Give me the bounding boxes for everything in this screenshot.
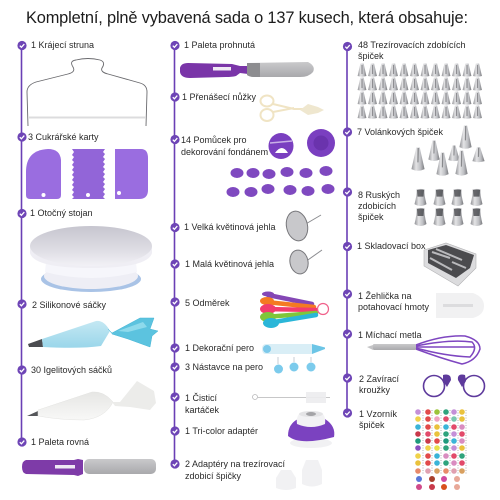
item: russian tips: špiček [358,212,384,222]
item: plastic bags: 30 Igelitových sáčků [31,365,112,375]
panel: left column [17,40,158,476]
panel: middle column [170,40,335,490]
item: tri-color adapter [170,411,334,448]
item: decorating pen: 1 Dekorační pero [185,343,254,353]
panel: right column [343,40,485,490]
item: cleaning brush: kartáček [185,405,220,415]
timeline: right [346,46,348,413]
title: Kompletní, plně vybavená sada o 137 kusech, která obsahuje: [26,9,468,27]
item: decorating pen [170,343,325,354]
icon: sampler sheet [415,409,466,490]
item: whisk: 1 Míchací metla [358,330,422,340]
item: fondant smoother: potahovací hmoty [358,302,430,312]
item: offset palette: 1 Paleta prohnutá [184,40,255,50]
item: plastic bags [17,365,156,420]
item: scraper cards: 3 Cukrářské karty [28,132,99,142]
item: cleaning brush: 1 Čisticí [185,393,218,403]
item: straight palette [17,437,156,476]
item: turntable: 1 Otočný stojan [30,208,93,218]
item: russian tips: zdobicích [358,201,396,211]
item: tip sampler chart: 1 Vzorník [359,409,398,419]
item: tip sampler chart [343,408,466,490]
item: fondant tools [170,129,335,197]
item: large flower nail [170,209,321,243]
item: cutter: 1 Krájecí struna [31,40,94,50]
item: closing rings: 2 Zavírací [359,374,400,384]
item: scissors [170,92,324,121]
item: fondant smoother: 1 Žehlička na [358,291,412,301]
item: small flower nail: 1 Malá květinová jehla [185,259,274,269]
item: fondant smoother [343,289,484,318]
item: cleaning brush [170,392,330,415]
item: closing rings [343,373,484,396]
item: 48 piping tips [343,40,482,119]
item: coupler adapters [170,459,322,490]
timeline: middle [174,45,176,464]
item: silicone bags: 2 Silikonové sáčky [32,300,107,310]
item: scraper cards [17,132,148,199]
item: whisk [343,329,480,364]
item: ruffle tips: 7 Volánkových špiček [357,127,444,137]
item: large flower nail: 1 Velká květinová jehla [184,222,276,232]
item: cutter [17,40,147,126]
item: ruffle tips [343,125,485,176]
item: storage box: 1 Skladovací box [357,241,426,251]
item: pen nozzles: 3 Nástavce na pero [185,362,263,372]
item: offset palette [170,40,314,78]
item: fondant tools: dekorování fondánem [181,147,268,157]
item: closing rings: kroužky [359,385,391,395]
item: scissors: 1 Přenášecí nůžky [182,92,257,102]
item: 48 piping tips: 48 Trezírovacích zdobících [358,40,466,50]
item: tip sampler chart: špiček [359,420,385,430]
timeline: left [20,45,22,442]
item: fondant tools: 14 Pomůcek pro [181,135,247,145]
item: russian tips [343,187,482,226]
item: turntable [17,208,152,292]
item: russian tips: 8 Ruských [358,190,400,200]
item: straight palette: 1 Paleta rovná [31,437,89,447]
item: tri-color adapter: 1 Tri-color adaptér [185,426,258,436]
item: 48 piping tips: špiček [358,51,384,61]
item: coupler adapters: 2 Adaptéry na trezírovací [185,459,286,469]
item: pen nozzles [170,357,316,374]
item: measuring spoons: 5 Odměrek [185,298,230,308]
item: small flower nail [170,248,322,276]
item: measuring spoons [170,292,328,328]
item: coupler adapters: zdobicí špičky [185,471,242,481]
icon: nozzle rows [358,64,482,119]
item: silicone bags [17,299,158,348]
item: storage box [343,241,476,286]
